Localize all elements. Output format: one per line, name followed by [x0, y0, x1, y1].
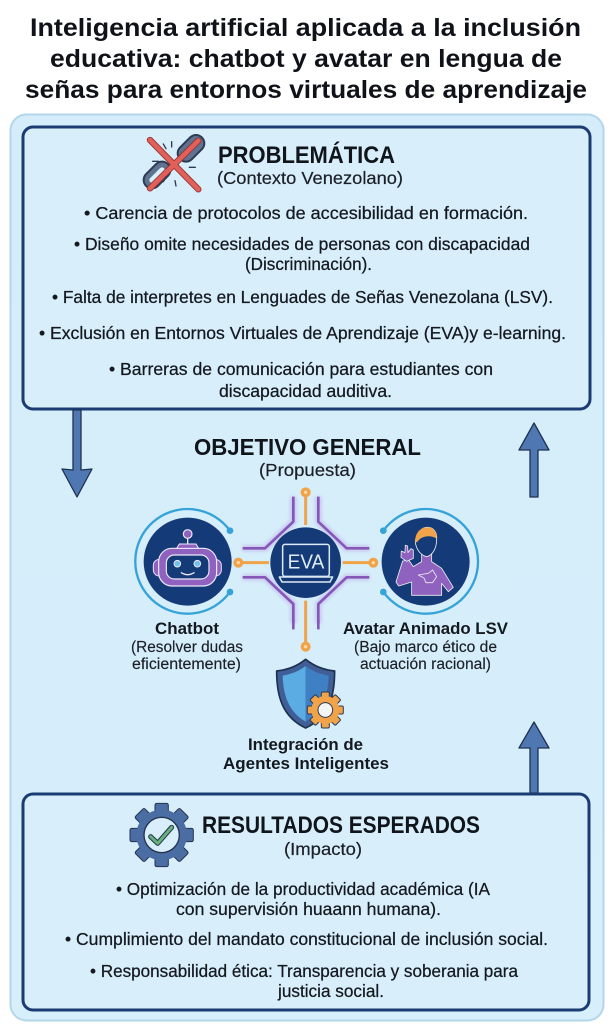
- heading: RESULTADOS ESPERADOS: [202, 812, 480, 839]
- circuit lines: [243, 497, 369, 623]
- bullet list: • Barreras de comunicación para estudiantes con: [109, 359, 493, 379]
- bullet list: discapacidad auditiva.: [219, 381, 392, 401]
- panel: resultados esperados: [23, 794, 589, 1010]
- title: señas para entornos virtuales de aprendizaje: [25, 76, 587, 104]
- arrow: down left: [62, 410, 92, 497]
- title: [25, 14, 587, 104]
- icon: broken chain with cross: [150, 140, 198, 189]
- heading: objetivo general: (Propuesta): [259, 460, 356, 480]
- label: avatar: (Bajo marco ético de: [354, 639, 497, 656]
- title: educativa: chatbot y avatar en lengua de: [50, 45, 562, 73]
- bullet list: • Falta de interpretes en Lenguades de Señas Venezolana (LSV).: [52, 287, 553, 307]
- label: chatbot: (Resolver dudas: [131, 639, 243, 656]
- icon: avatar LSV: [380, 509, 478, 614]
- heading: objetivo general: OBJETIVO GENERAL: [194, 434, 421, 460]
- icon: shield with gear: [277, 659, 343, 728]
- subheading: (Impacto): [284, 839, 362, 859]
- bullet list: • Cumplimiento del mandato constitucional de inclusión social.: [65, 929, 548, 949]
- bullet list: con supervisión huaann humana).: [176, 899, 441, 919]
- label: integración: Agentes Inteligentes: [223, 755, 389, 773]
- subheading: (Contexto Venezolano): [217, 168, 403, 188]
- title: Inteligencia artificial aplicada a la inclusión: [30, 14, 581, 42]
- diagram: EVA hub: [135, 487, 478, 623]
- panel: problemática: [23, 127, 590, 409]
- bullet list: justicia social.: [277, 981, 384, 1001]
- bullet list: • Exclusión en Entornos Virtuales de Aprendizaje (EVA)y e-learning.: [39, 323, 566, 343]
- label: chatbot: eficientemente): [132, 656, 241, 673]
- icon: EVA laptop: [270, 527, 341, 598]
- arrow: up lower right: [519, 722, 549, 793]
- label: chatbot: Chatbot: [155, 620, 220, 638]
- bullet list: (Discriminación).: [245, 254, 372, 274]
- icon: chatbot: [135, 509, 233, 614]
- arrow: up right: [519, 423, 549, 497]
- label: avatar: [343, 620, 508, 673]
- label: chatbot: [131, 620, 243, 673]
- label: integración: [223, 736, 389, 773]
- lower connector and shield: [277, 620, 343, 728]
- icon: gear with check: [130, 803, 193, 867]
- label: integración: Integración de: [248, 736, 363, 754]
- bullet list: • Responsabilidad ética: Transparencia y soberania para: [90, 961, 518, 981]
- label: avatar: actuación racional): [360, 656, 491, 673]
- bullet list: [65, 879, 548, 1001]
- heading: objetivo general: [194, 434, 421, 480]
- bullet list: • Carencia de protocolos de accesibilidad en formación.: [84, 203, 528, 223]
- bullet list: [39, 203, 566, 401]
- bullet list: • Optimización de la productividad académica (IA: [116, 879, 490, 899]
- icon: EVA laptop: EVA: [288, 550, 325, 573]
- label: avatar: Avatar Animado LSV: [343, 620, 508, 638]
- bullet list: • Diseño omite necesidades de personas con discapacidad: [74, 234, 530, 254]
- heading: PROBLEMÁTICA: [218, 141, 395, 169]
